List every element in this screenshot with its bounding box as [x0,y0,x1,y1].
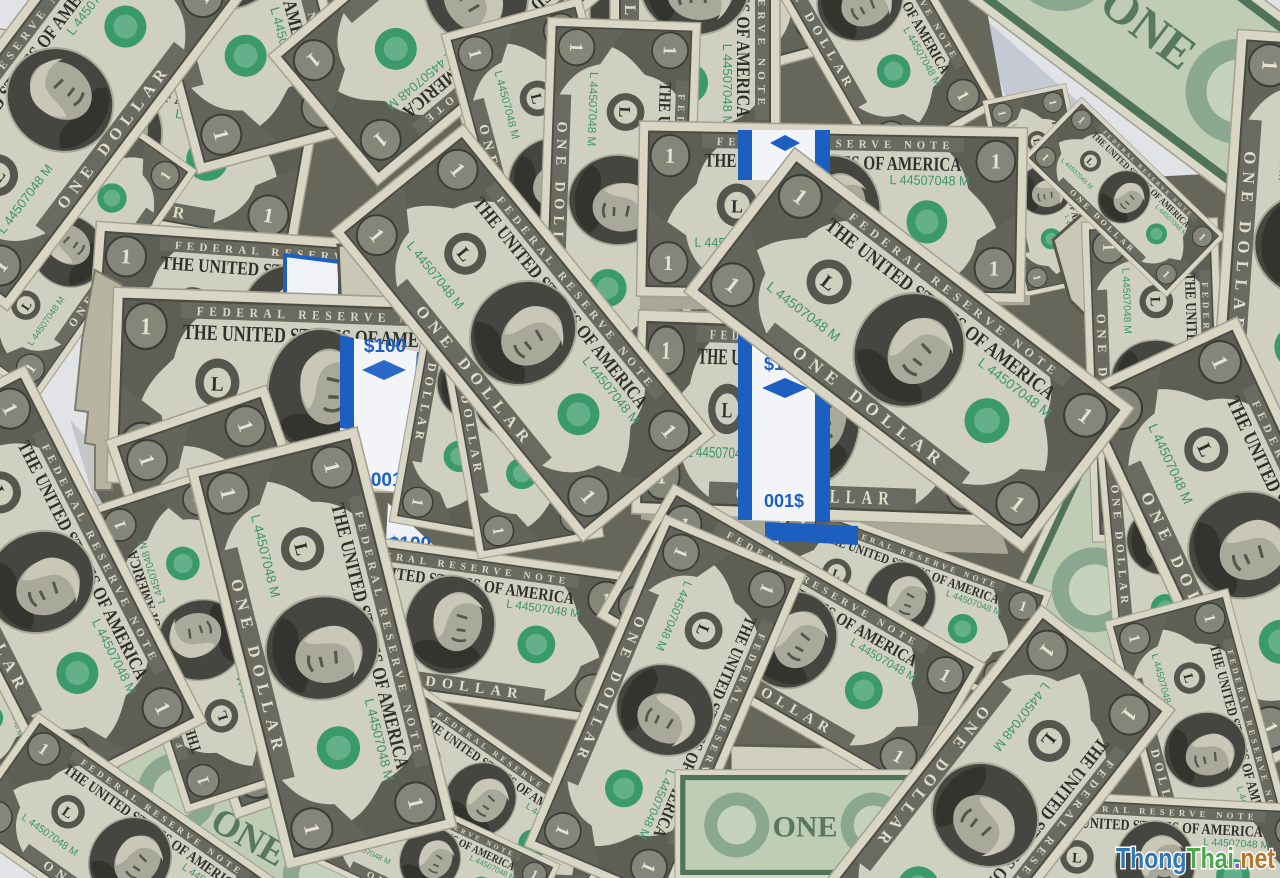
bill: top centre upright [610,0,780,185]
bill: centre front upside down [524,514,806,878]
bill: lower right front [795,605,1175,878]
bill: bottom right flat [992,789,1280,878]
bill: light strip lower centre [730,745,880,772]
bill: lower left behind tall bill [106,385,396,819]
bill: bottom right upright [1105,589,1280,878]
band: centre stack $100 band: $100 [764,354,804,374]
bill: top centre strip [425,0,855,149]
bill: back of left stack [85,221,495,419]
bill: lower middle behind [331,671,629,878]
bill: right column diagonal [1023,97,1225,297]
bill: left under corner [0,102,197,400]
bill: top of left stack [107,287,533,497]
bill: top of centre stack [632,310,998,526]
bill: right of centre lower [748,496,1052,704]
bill: green back bottom centre [675,770,935,878]
shaded gap at top right [975,10,1110,180]
bill: narrow upper left [94,0,362,174]
bill: green back bottom [77,696,423,878]
stack side: upper stack edges [640,295,1030,310]
bill: bottom left [0,713,300,878]
bill: centre lower with green seal [261,524,639,726]
pale shadow gap on the left [70,420,150,630]
bill: under main bill left [389,226,567,544]
bill: top left corner [0,0,248,311]
bill: right side large [1075,317,1280,773]
bill: right side narrow [1094,395,1236,685]
band: centre stack $100 band [738,330,858,545]
bill: under main bill right [426,241,604,559]
bill: green back right [995,324,1269,694]
band: loose blue band below stack: $100 [389,534,431,555]
band: loose blue band below stack [385,503,456,655]
bill: green back lower left [0,604,195,878]
bill: large lower left front [187,427,457,869]
stack side: left stack edges [75,270,122,490]
bill: left large portrait [0,365,207,799]
bill: above main bill left [441,0,669,363]
bill: left edge small [0,531,60,789]
bill: right column lower [1081,218,1229,542]
bill: bottom middle small [300,763,560,878]
band: upper stack band [738,130,830,180]
band: left stack $100 band: 001$ [371,470,414,491]
band: small blue band on rear stack [285,255,340,300]
bill: main right front [684,148,1134,552]
watermark: ThongThai.net [1116,843,1275,875]
bill: right edge tall [1208,29,1280,461]
bill: right column upright [983,83,1107,297]
stack side: centre stack edges [640,500,1010,555]
bill: scrap under main bill [338,245,420,335]
bill: small scrap right column [1053,198,1120,330]
bill: green back top right [929,0,1280,223]
band: left stack $100 band [340,335,432,495]
bill: far left edge [0,34,27,386]
bill: above main bill right [535,17,701,383]
band: centre stack $100 band: 001$ [764,491,804,511]
bill: top right of centre [721,0,999,173]
bill: upper left behind [0,17,324,253]
bill: lower right of centre with green seal [597,484,985,796]
band: left stack $100 band: $100 [364,336,406,357]
bill: upper right stack [637,121,1027,303]
bill: top middle left [268,0,684,186]
bill: lower left small [87,467,315,813]
bill: main centre front [331,124,715,542]
